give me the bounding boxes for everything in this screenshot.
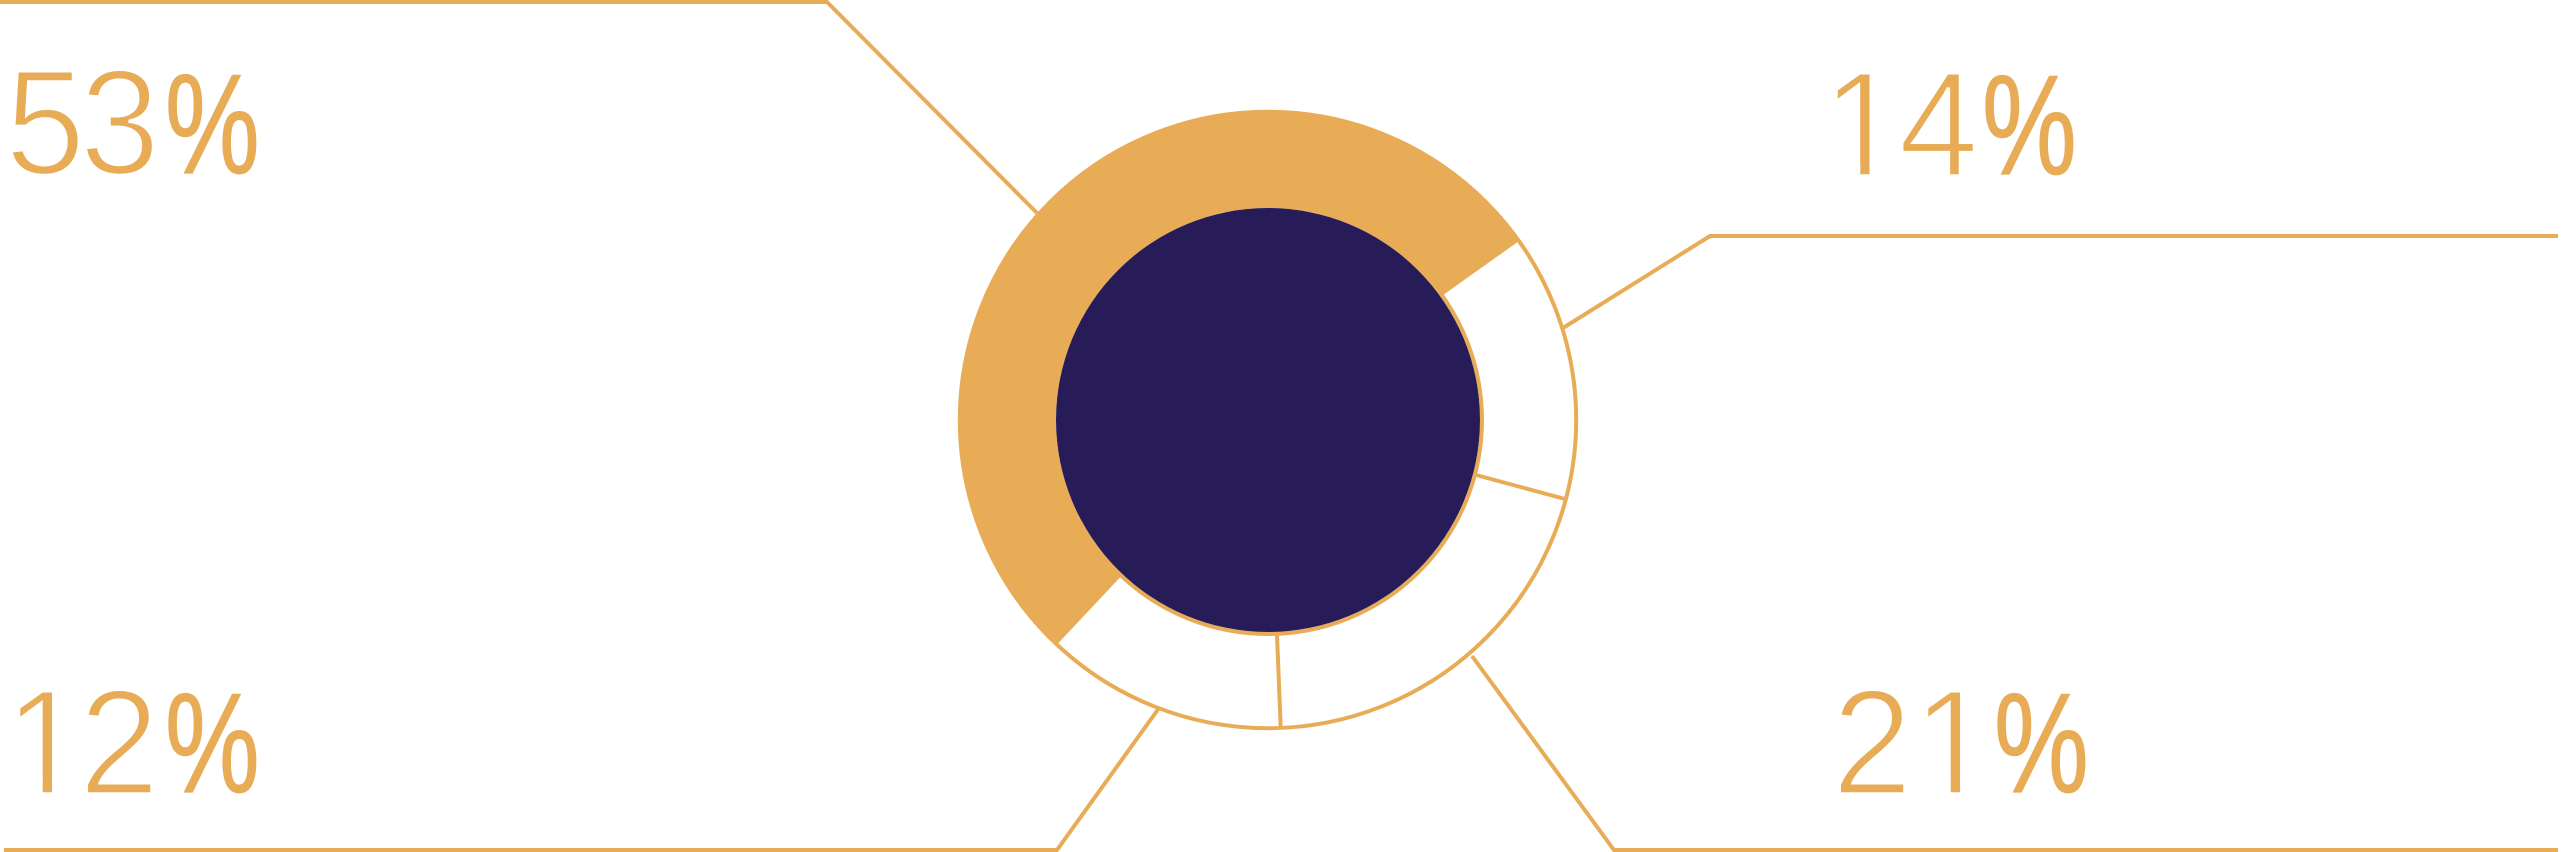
label: 53%: % <box>165 44 260 204</box>
label: 21%: % <box>1994 663 2089 823</box>
donut outer ring <box>960 112 1576 728</box>
segment: 53% filled slice <box>958 110 1520 646</box>
leader line: 21% <box>1472 656 2558 850</box>
label: 21%: 21 <box>1832 659 1993 827</box>
leader line: 12% <box>4 708 1159 850</box>
donut inner ring <box>1054 206 1482 634</box>
leader line: 53% <box>0 2 1037 213</box>
separator: 14% and 21% <box>1476 475 1565 499</box>
label: 14%: 14 <box>1822 41 1979 209</box>
label: 12%: % <box>165 663 260 823</box>
donut centre <box>1056 208 1480 632</box>
label: 53% <box>5 39 260 207</box>
label: 53%: 53 <box>5 39 160 207</box>
label: 12%: 12 <box>5 659 159 827</box>
label: 14% <box>1822 41 2077 209</box>
separator: 21% and 12% <box>1277 635 1281 727</box>
leader line: 14% <box>1563 236 2558 328</box>
donut chart <box>958 110 1576 728</box>
label: 12% <box>5 659 260 827</box>
label: 21% <box>1832 659 2089 827</box>
label: 14%: % <box>1982 45 2077 205</box>
